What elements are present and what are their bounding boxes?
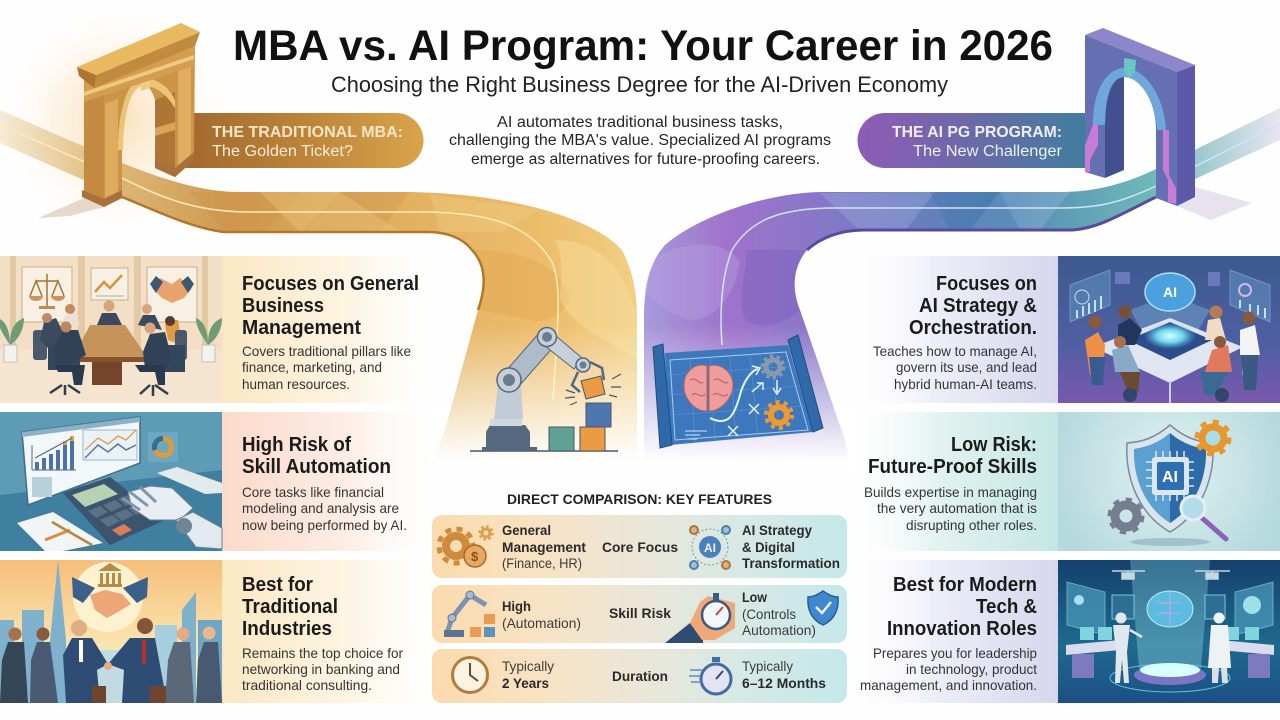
icon: AI brain: [1145, 273, 1195, 311]
heading: [242, 574, 338, 640]
illustration: team around AI console: [1058, 256, 1280, 403]
text: typically 6-12 months: Typically: [742, 658, 793, 674]
heading: Tech &: [976, 596, 1037, 618]
heading: [242, 273, 419, 339]
icon: gear and dollar: [439, 526, 492, 567]
heading: Skill Automation: [242, 456, 391, 478]
shadow under arches: [38, 187, 1252, 220]
comparison row: core focus: [432, 515, 847, 578]
text: general management: Management: [502, 539, 586, 555]
heading: direct comparison: DIRECT COMPARISON: KEY FEATURES: [507, 491, 772, 507]
people: [1085, 306, 1260, 402]
robot figure: [1113, 612, 1142, 683]
heading: Best for Modern: [893, 574, 1037, 596]
text: low controls automation: Automation): [742, 622, 816, 638]
illustration: robot arm stacking blocks: [470, 328, 621, 451]
pill: the traditional MBA: The Golden Ticket?: [212, 143, 353, 160]
body text: [864, 484, 1037, 533]
panel: high risk of skill automation: [0, 412, 440, 551]
text: typically 6-12 months: 6–12 Months: [742, 675, 826, 691]
illustration: AI shield: [1058, 412, 1280, 551]
icon: robot arm: [444, 591, 495, 637]
text: AI strategy: Transformation: [742, 555, 840, 571]
title: MBA vs. AI Program: Your Career in 2026: [233, 22, 1053, 70]
icon: AI hub: AI: [704, 541, 716, 555]
pill: the traditional MBA: [180, 113, 424, 168]
body text: finance, marketing, and: [242, 359, 382, 375]
illustration: boardroom meeting: [0, 256, 222, 403]
icon: golden arch: [77, 23, 200, 207]
holographic screens: [1070, 270, 1270, 322]
intro paragraph: challenging the MBA's value. Specialized AI programs: [449, 132, 831, 149]
icon: brain: [684, 365, 733, 411]
panel: low risk future-proof skills: [850, 412, 1280, 551]
illustration: robot hand on calculator: [0, 412, 222, 551]
heading: AI Strategy &: [919, 295, 1037, 317]
heading: [909, 273, 1037, 339]
body text: [860, 645, 1037, 693]
heading: Orchestration.: [909, 317, 1037, 339]
heading: [887, 574, 1037, 640]
body text: [242, 343, 411, 392]
panel: modern tech and innovation roles: [850, 560, 1280, 703]
heading: Management: [242, 317, 361, 339]
text: low controls automation: (Controls: [742, 606, 796, 622]
heading: Low Risk:: [951, 434, 1037, 456]
icon: check shield: [808, 591, 838, 625]
icon: gear and dollar: $: [471, 549, 479, 564]
road: traditional MBA path: [0, 110, 637, 470]
label: duration: Duration: [612, 668, 668, 684]
text: general management: (Finance, HR): [502, 555, 582, 571]
heading: Innovation Roles: [887, 618, 1037, 640]
panel: AI strategy and orchestration: [850, 256, 1280, 403]
heading: High Risk of: [242, 434, 351, 456]
calculator: [63, 477, 165, 545]
text: AI strategy: AI Strategy: [742, 522, 812, 538]
body text: networking in banking and: [242, 661, 400, 677]
body text: [873, 343, 1037, 392]
icon: platform: [1110, 663, 1230, 692]
body text: human resources.: [242, 376, 350, 392]
body text: Builds expertise in managing: [864, 484, 1037, 500]
handshake: [72, 577, 148, 618]
icon: drones: [1112, 571, 1230, 579]
text: high automation: [502, 598, 581, 631]
people: foreground: [48, 322, 185, 396]
icon: stopwatch: [689, 657, 731, 694]
icon: bank: [98, 563, 122, 587]
road: AI program path: [644, 108, 1280, 470]
icon: shield: [1127, 425, 1213, 532]
text: low controls automation: [742, 589, 816, 638]
pill: the AI PG program: [857, 113, 1095, 168]
icon: handshake frame: [147, 267, 197, 322]
intro paragraph: [449, 114, 831, 168]
table: [1093, 318, 1243, 383]
desks: [1066, 627, 1274, 678]
subtitle: Choosing the Right Business Degree for the AI-Driven Economy: [331, 72, 948, 97]
icon: orange gear: [766, 402, 792, 428]
robot hand: [122, 486, 222, 549]
bar chart in window: [32, 436, 76, 470]
text: typically 6-12 months: [742, 658, 826, 691]
icon: orange gear: [1197, 422, 1229, 454]
text: AI strategy: & Digital: [742, 539, 795, 555]
icon: AI chip: AI: [1162, 469, 1178, 486]
body text: [242, 484, 407, 533]
comparison row: duration: [432, 649, 847, 703]
heading: Future-Proof Skills: [868, 456, 1037, 478]
icon: magnifier: [1181, 496, 1226, 539]
skyline: [0, 560, 222, 703]
heading: [242, 434, 391, 478]
heading: Focuses on: [936, 273, 1037, 295]
text: high automation: (Automation): [502, 615, 581, 631]
body text: hybrid human-AI teams.: [894, 376, 1037, 392]
text: typically 2 years: Typically: [502, 658, 554, 674]
holographic screens: [1067, 582, 1273, 635]
label: core focus: Core Focus: [602, 539, 678, 555]
icon: chart frame: [91, 268, 128, 300]
people: background: [33, 300, 187, 360]
text: general management: [502, 522, 586, 571]
text: low controls automation: Low: [742, 589, 767, 605]
golden glow behind MBA arch: [0, 5, 230, 235]
body text: Core tasks like financial: [242, 484, 384, 500]
pill: the AI PG program: THE AI PG PROGRAM:: [892, 124, 1062, 141]
report on desk: [17, 467, 222, 551]
pill: the AI PG program: The New Challenger: [913, 143, 1062, 160]
text: typically 2 years: 2 Years: [502, 675, 549, 691]
body text: traditional consulting.: [242, 677, 372, 693]
text: general management: General: [502, 522, 551, 538]
icon: grey gear: [1110, 500, 1142, 532]
text: typically 2 years: [502, 658, 554, 691]
front body with opening: [84, 43, 195, 207]
heading: [868, 434, 1037, 478]
heading: Best for: [242, 574, 313, 596]
body text: Prepares you for leadership: [873, 645, 1037, 661]
body text: modeling and analysis are: [242, 500, 399, 516]
icon: grey gear: [762, 356, 784, 378]
body text: Covers traditional pillars like: [242, 343, 411, 359]
white fade at base of both roads: [430, 325, 855, 470]
illustration: futuristic lab with robots: [1058, 560, 1280, 703]
icon: AI chip: [1146, 451, 1194, 501]
icon: AI hub: [690, 526, 730, 569]
body text: management, and innovation.: [860, 677, 1037, 693]
icon: hand with stopwatch: [665, 593, 735, 643]
icon: donut chart: [148, 432, 178, 462]
icon: clock: [452, 658, 488, 692]
icon: plants: [0, 318, 222, 362]
heading: Traditional: [242, 596, 338, 618]
heading: Focuses on General: [242, 273, 419, 295]
pill: the traditional MBA: THE TRADITIONAL MBA:: [212, 124, 403, 141]
heading: Business: [242, 295, 324, 317]
icon: AI arch: [1085, 28, 1195, 206]
body text: in technology, product: [906, 661, 1037, 677]
icon: AI brain: AI: [1163, 284, 1177, 300]
body text: disrupting other roles.: [906, 517, 1037, 533]
label: skill risk: Skill Risk: [609, 605, 671, 621]
text: AI strategy: [742, 522, 840, 571]
body text: Remains the top choice for: [242, 645, 403, 661]
intro paragraph: AI automates traditional business tasks,: [497, 114, 783, 131]
panel: best for traditional industries: [0, 560, 440, 703]
people: [0, 618, 222, 703]
heading: Industries: [242, 618, 332, 640]
panel: general business management: [0, 256, 440, 403]
body text: govern its use, and lead: [896, 359, 1037, 375]
comparison row: skill risk: [432, 585, 847, 643]
table: [73, 325, 147, 357]
body text: now being performed by AI.: [242, 517, 407, 533]
intro paragraph: emerge as alternatives for future-proofing careers.: [471, 151, 820, 168]
body text: the very automation that is: [877, 500, 1037, 516]
illustration: AI blueprint with brain and gears: [653, 335, 823, 448]
illustration: business handshake with skyline: [0, 560, 222, 703]
text: high automation: High: [502, 598, 531, 614]
icon: scales frame: [22, 267, 72, 322]
icon: brain hologram: [1147, 591, 1193, 627]
body text: [242, 645, 403, 693]
body text: Teaches how to manage AI,: [873, 343, 1037, 359]
line chart in window: [83, 430, 137, 460]
scientist figure: [1208, 612, 1231, 683]
